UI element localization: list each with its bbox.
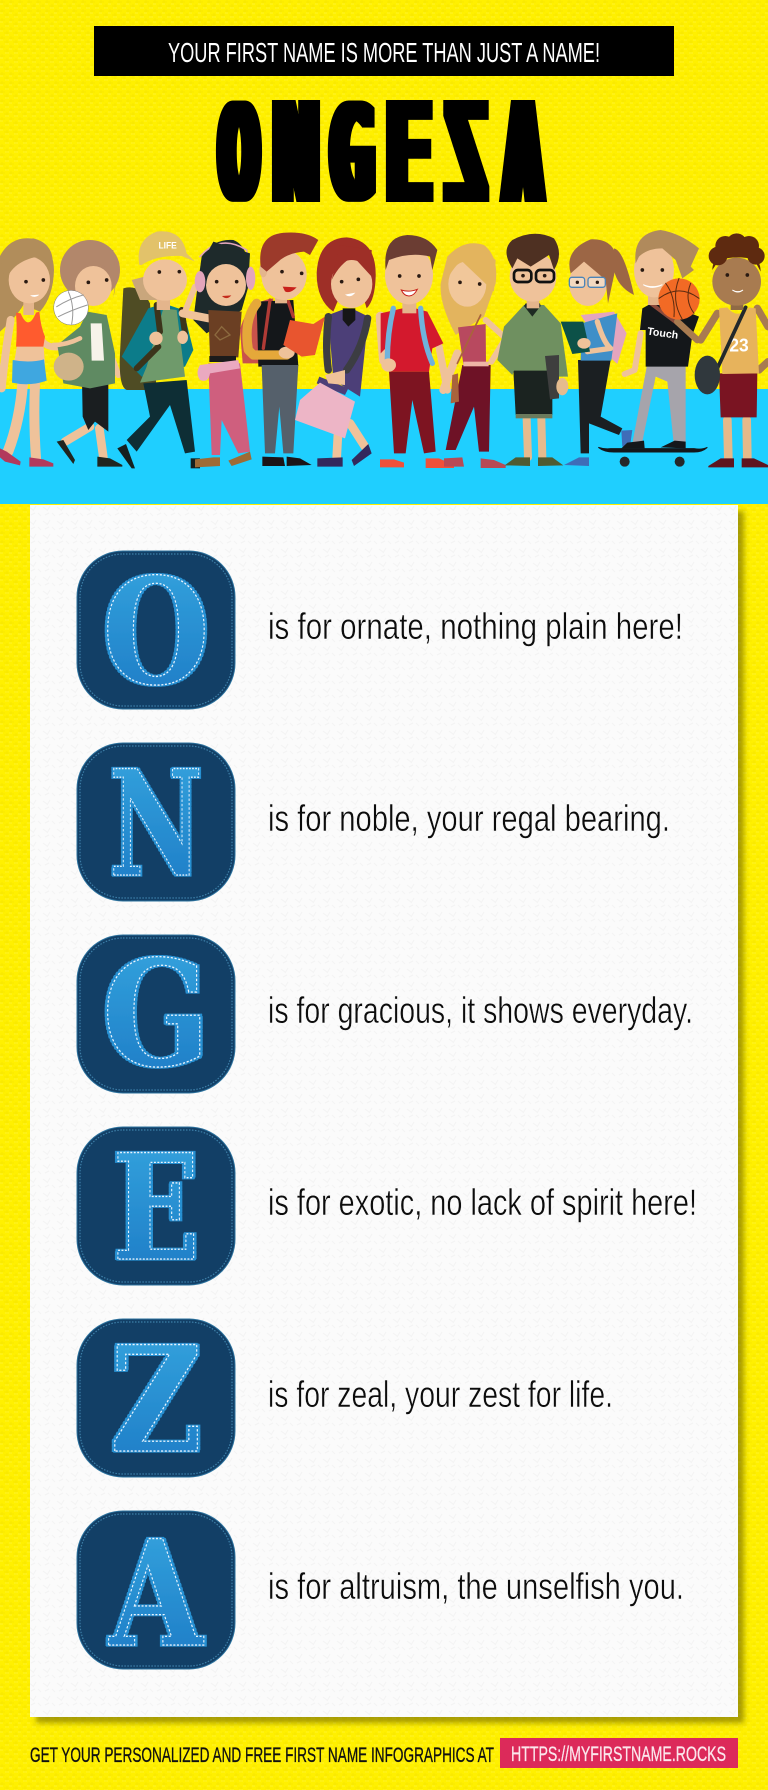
icon: letter A badge bbox=[77, 1509, 235, 1680]
icon: letter N badge: N bbox=[109, 738, 203, 910]
icon: letter E badge bbox=[77, 1122, 235, 1294]
row: letter A bbox=[77, 1509, 684, 1680]
icon: letter Z badge: Z bbox=[110, 1315, 202, 1486]
student: boy on skateboard with basketball: Touch bbox=[646, 326, 679, 342]
title: name bbox=[220, 72, 540, 236]
row: letter Z bbox=[77, 1315, 613, 1486]
illustration: group of twelve students bbox=[0, 230, 768, 468]
title: name: N bbox=[273, 73, 319, 236]
student: girl with headphones bbox=[183, 240, 255, 467]
row: letter G bbox=[77, 929, 693, 1100]
icon: letter G badge: G bbox=[102, 929, 210, 1100]
row: letter E bbox=[77, 1122, 697, 1294]
student: boy in yellow tank with bag bbox=[695, 233, 768, 467]
icon: letter N badge bbox=[77, 738, 235, 910]
student: boy in red shirt bbox=[380, 235, 454, 468]
student: boy with cap and backpack bbox=[117, 231, 200, 468]
icon: letter E badge: E bbox=[113, 1122, 199, 1294]
panel: letter card bbox=[30, 505, 738, 1717]
icon: letter A badge: A bbox=[108, 1509, 205, 1680]
student: boy with glasses and laptop bbox=[497, 234, 568, 466]
footer bbox=[30, 1738, 738, 1768]
footer link button bbox=[500, 1738, 738, 1768]
student: girl with red hair and pink bag bbox=[295, 237, 376, 467]
student: girl with volleyball bbox=[53, 240, 122, 467]
text: Z line: is for zeal, your zest for life. bbox=[268, 1374, 613, 1415]
header banner bbox=[94, 26, 674, 76]
title: name: E bbox=[383, 72, 435, 236]
student: boy with cap and backpack: LIFE bbox=[158, 241, 177, 251]
right six students bbox=[380, 230, 768, 468]
student: girl in orange top bbox=[0, 238, 78, 467]
row: letter N bbox=[77, 738, 670, 910]
student: blonde girl bbox=[441, 243, 506, 468]
student: girl with ponytail and tablet bbox=[561, 239, 634, 466]
title: name: O bbox=[220, 75, 258, 232]
student: boy on skateboard with basketball bbox=[598, 230, 707, 467]
text: N line: is for noble, your regal bearing. bbox=[268, 798, 670, 839]
title: name: G bbox=[331, 76, 374, 232]
left six students bbox=[0, 231, 376, 468]
icon: letter G badge bbox=[77, 929, 235, 1100]
blue floor band bbox=[0, 389, 768, 504]
icon: letter O badge bbox=[77, 545, 235, 718]
title: name: A bbox=[506, 73, 540, 236]
title: name: Z bbox=[446, 73, 486, 236]
footer call to action: GET YOUR PERSONALIZED AND FREE FIRST NAME INFOGRAPHICS AT bbox=[30, 1744, 494, 1767]
student: boy in yellow tank with bag: 23 bbox=[729, 335, 749, 356]
student: boy with book bbox=[240, 233, 325, 466]
icon: letter O badge: O bbox=[103, 545, 209, 718]
icon: letter Z badge bbox=[77, 1315, 235, 1486]
row: letter O bbox=[77, 545, 683, 718]
